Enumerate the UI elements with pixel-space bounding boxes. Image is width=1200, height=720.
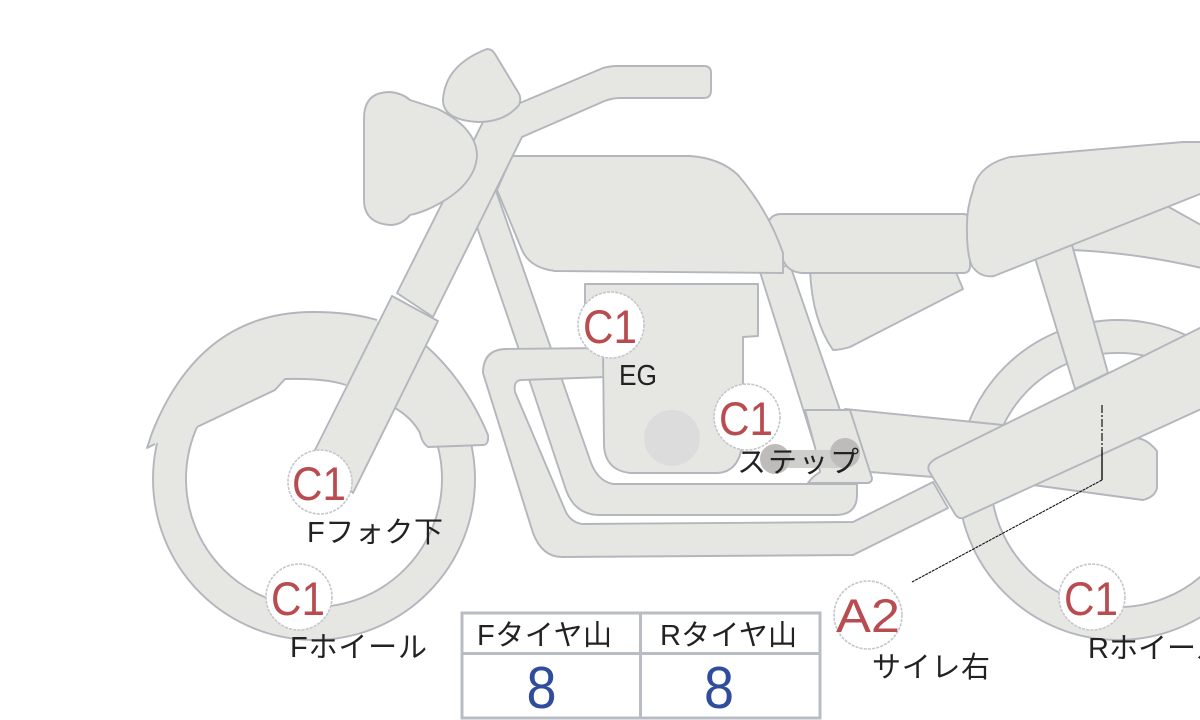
engine body [585, 284, 758, 473]
front tread header: Fタイヤ山 [477, 620, 612, 652]
tire tread table [462, 613, 820, 720]
badge: front fork C1: C1 [292, 457, 346, 510]
label: EG: EG [619, 360, 657, 392]
badge: front wheel C1: C1 [271, 572, 325, 625]
label: silencer right: サイレ右 [872, 651, 990, 684]
badge: muffler A2: A2 [836, 589, 900, 642]
exhaust pipe [483, 348, 948, 557]
front tread value: 8 [526, 655, 556, 720]
engine cover circle [644, 410, 700, 466]
seat front pad [768, 214, 970, 273]
badge: step C1: C1 [719, 392, 773, 445]
seat [967, 142, 1200, 276]
rear shock absorber [1035, 245, 1108, 389]
rear tread header: Rタイヤ山 [660, 620, 797, 652]
side cover [810, 270, 963, 350]
lower frame [477, 188, 857, 515]
rear wheel [958, 320, 1200, 640]
front fender [147, 312, 488, 448]
badge: muffler A2 [834, 581, 902, 649]
label: front wheel: Fホイール [290, 632, 427, 664]
table grid [462, 613, 820, 718]
label: step: ステップ [737, 447, 859, 479]
rear fender [1040, 206, 1200, 270]
badge: engine C1: C1 [583, 300, 637, 353]
headlight [364, 92, 477, 225]
engine [585, 284, 758, 473]
front wheel [153, 318, 475, 640]
leader line to muffler [912, 405, 1102, 582]
upper fork and handlebar [397, 66, 711, 317]
muffler [928, 323, 1200, 518]
fuel tank [497, 156, 783, 273]
label: front fork lower: Fフォク下 [307, 517, 443, 549]
step pegs [760, 438, 860, 474]
meter [443, 49, 520, 122]
swingarm [845, 409, 1157, 500]
rear frame tube [760, 265, 840, 447]
rear footrest plate [805, 410, 872, 483]
badge: rear wheel C1: C1 [1064, 572, 1118, 625]
front fork lower tube [315, 296, 438, 493]
rear tread value: 8 [704, 655, 734, 720]
